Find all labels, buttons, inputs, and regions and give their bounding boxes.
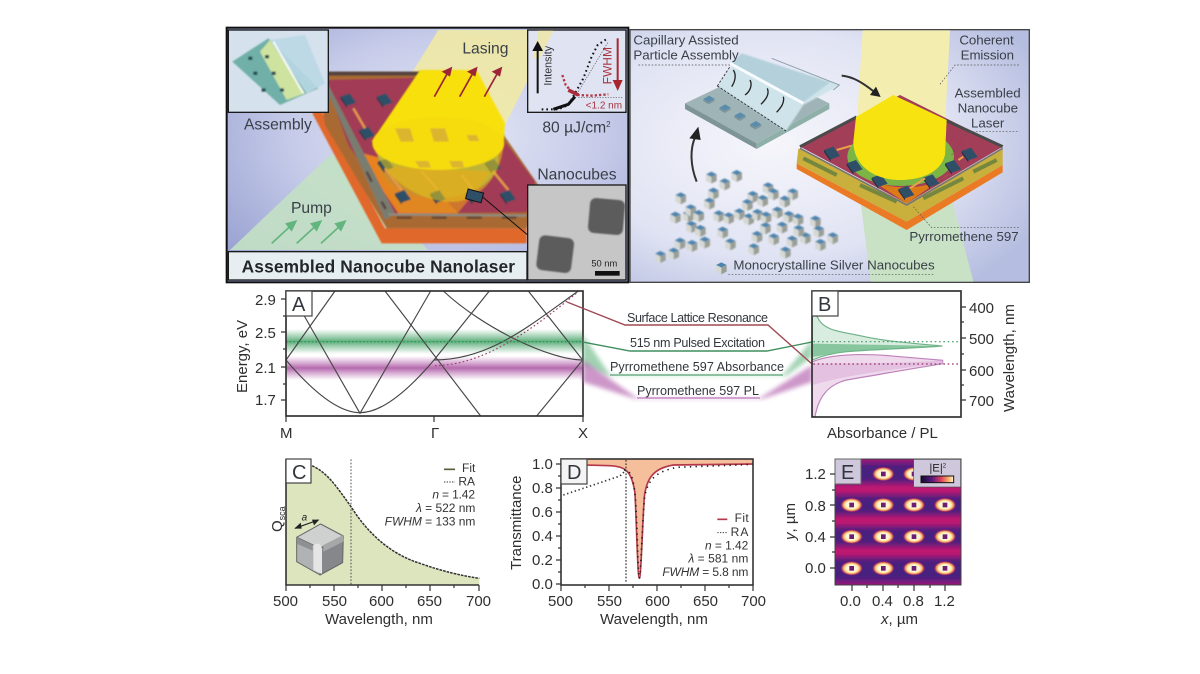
legend (385, 461, 476, 528)
x axis E: x, µm (880, 611, 918, 628)
x axis D: 500 (548, 593, 573, 610)
y axis E: 0.0 (805, 560, 826, 577)
y axis D: Transmittance (508, 476, 525, 570)
panel label A (286, 291, 312, 316)
y label C: Q (269, 520, 286, 532)
x axis E: 0.4 (872, 593, 893, 610)
emission beam (857, 30, 950, 125)
inset: assembly (228, 30, 328, 112)
y axis A: 1.7 (255, 392, 276, 409)
resonance fill (561, 459, 753, 578)
panel: assembled nanocube nanolaser (227, 28, 628, 282)
label: PL: Pyrromethene 597 PL (637, 384, 759, 398)
legend: RA (731, 525, 748, 539)
title bar (228, 252, 527, 280)
label: coherent: Coherent (959, 32, 1014, 47)
process arrows (689, 76, 881, 182)
pump beam (230, 153, 428, 250)
cube icon (294, 513, 343, 575)
y axis D: 0.4 (532, 528, 553, 545)
x axis C: 500 (273, 593, 298, 610)
legend: λ = 522 nm (415, 501, 475, 515)
assembly substrate (685, 53, 840, 149)
chart A: band structure (234, 291, 588, 442)
inset: threshold chart (528, 30, 626, 112)
y axis A: Energy, eV (234, 320, 251, 393)
x axis E: 1.2 (934, 593, 955, 610)
right axis B: 700 (969, 393, 994, 410)
legend: Fit (462, 461, 476, 475)
x axis E (840, 585, 955, 628)
y axis E: 0.8 (805, 498, 826, 515)
legend: λ = 581 nm (687, 552, 748, 566)
pump arrows (272, 220, 347, 243)
x label B: Absorbance / PL (827, 425, 938, 442)
y axis A (234, 292, 286, 409)
fitted area (286, 465, 479, 585)
legend: FWHM = 5.8 nm (662, 565, 748, 579)
inset pointer (478, 193, 528, 235)
x axis D: 700 (741, 593, 766, 610)
y axis D (508, 456, 561, 593)
y axis A: 2.9 (255, 292, 276, 309)
lasing beam (372, 30, 553, 138)
x axis D: Wavelength, nm (600, 611, 708, 628)
color scale legend: 2 (943, 464, 947, 470)
panel label D (561, 459, 587, 484)
label: threshold: 80 µJ/cm (542, 119, 606, 136)
y axis D: 1.0 (532, 456, 553, 473)
connector lines (610, 374, 783, 376)
green excitation band (286, 329, 583, 354)
right axis B: 600 (969, 363, 994, 380)
x axis D: 650 (693, 593, 718, 610)
x axis D: 600 (645, 593, 670, 610)
connector: band links (567, 302, 812, 399)
panel label C: C (292, 462, 306, 484)
right axis B: 400 (969, 300, 994, 317)
x axis D: 550 (597, 593, 622, 610)
inset: TEM image: 50 nm (591, 258, 617, 268)
absorbance curve (812, 315, 942, 360)
legend (662, 511, 749, 579)
legend: FWHM = 133 nm (385, 514, 475, 528)
y axis A: 2.5 (255, 325, 276, 342)
x axis D (548, 585, 766, 628)
panel label E: E (841, 462, 854, 484)
inset: threshold chart: Intensity (543, 45, 555, 86)
x axis A: Γ (431, 425, 439, 442)
inset: threshold chart: FWHM (601, 47, 615, 84)
x axis E: 0.8 (903, 593, 924, 610)
x axis C (273, 585, 491, 628)
label: pump: Pump (291, 200, 332, 217)
hot spots (840, 467, 956, 576)
panel: fabrication schematic (630, 30, 1029, 282)
y axis A: 2.1 (255, 360, 276, 377)
legend: n = 1.42 (705, 538, 749, 552)
inset: TEM image (528, 185, 626, 280)
x axis A (280, 416, 588, 442)
label: capillary assisted particle assembly: Capillary Assisted (633, 32, 739, 47)
y axis D: 0.8 (532, 480, 553, 497)
x axis C: 550 (322, 593, 347, 610)
legend: Fit (735, 511, 749, 525)
label: lasing: Lasing (462, 41, 508, 58)
x axis C: 650 (417, 593, 442, 610)
x axis C: Wavelength, nm (325, 611, 433, 628)
x axis A: X (578, 425, 588, 442)
right axis B: Wavelength, nm (1001, 304, 1018, 412)
highlighted nanocube (466, 189, 484, 203)
x axis E: 0.0 (840, 593, 861, 610)
label: absorbance: Pyrromethene 597 Absorbance (610, 360, 784, 374)
label: surface lattice resonance: Surface Lattice Resonance (627, 311, 768, 325)
y axis D: 0.6 (532, 504, 553, 521)
purple PL band (286, 356, 583, 380)
dispersion lines (286, 291, 583, 416)
laser device (312, 72, 538, 243)
label: 515 nm pulsed excitation: 515 nm Pulsed Excitation (630, 336, 765, 350)
panel label D: D (567, 462, 581, 484)
inset: threshold chart: <1.2 nm (586, 100, 622, 111)
yellow laser cylinder (372, 70, 505, 202)
y axis E: 1.2 (805, 466, 826, 483)
chart D: transmittance (508, 456, 766, 628)
label: threshold: 2 (606, 120, 611, 129)
x axis A: M (280, 425, 292, 442)
legend cube (716, 262, 727, 274)
label: nanocube: Nanocube (958, 101, 1018, 116)
legend: n = 1.42 (432, 488, 475, 502)
right axis B (961, 300, 1018, 412)
panel label A: A (292, 294, 306, 316)
panel label C (286, 459, 311, 484)
label: capillary second line: Particle Assembly (633, 47, 739, 62)
nanolaser (797, 95, 1003, 230)
label: assembly: Assembly (244, 117, 312, 134)
color scale legend (914, 459, 961, 487)
y axis E: 0.4 (805, 529, 826, 546)
label: nanocubes: Nanocubes (537, 167, 617, 184)
right axis B: 500 (969, 331, 994, 348)
x axis C: 700 (466, 593, 491, 610)
PL fan (583, 360, 812, 399)
label: monocrystalline silver nanocubes: Monocrystalline Silver Nanocubes (733, 257, 935, 272)
title bar: Assembled Nanocube Nanolaser (242, 256, 515, 276)
heat map background (835, 459, 961, 585)
y axis D: 0.0 (532, 576, 553, 593)
label: assembled: Assembled (955, 85, 1021, 100)
y axis E (782, 466, 835, 577)
panel label B (812, 291, 838, 316)
y label C: sca (277, 506, 287, 520)
panel label B: B (818, 294, 831, 316)
y axis D: 0.2 (532, 552, 553, 569)
x axis C: 600 (369, 593, 394, 610)
pump beam (859, 192, 973, 282)
absorbance fan (583, 335, 812, 376)
label: emission: Emission (961, 47, 1014, 62)
chart C: scattering (269, 459, 491, 628)
silver nanocubes (655, 170, 838, 263)
y axis E: y, µm (782, 503, 799, 541)
chart E: field map (787, 458, 962, 627)
legend: RA (458, 474, 475, 488)
label: pyrromethene 597: Pyrromethene 597 (909, 229, 1019, 244)
lasing arrows (434, 67, 502, 97)
label: laser: Laser (971, 115, 1005, 130)
PL curve (812, 355, 943, 417)
cube icon: a (302, 513, 308, 524)
color scale legend: |E| (929, 463, 943, 475)
chart B: absorbance and PL (812, 291, 1018, 442)
panel label E (835, 459, 861, 484)
